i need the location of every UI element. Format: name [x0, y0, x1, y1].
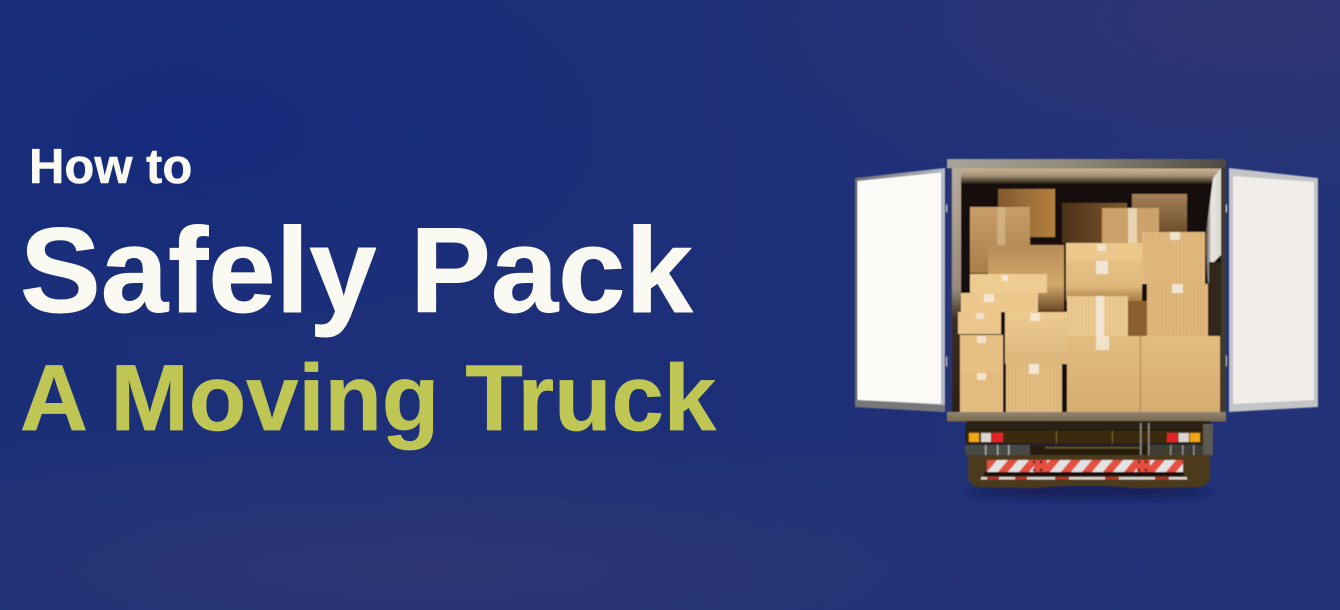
number plate brackets	[1033, 460, 1150, 472]
stacked cardboard boxes	[958, 189, 1220, 412]
ground shadow	[968, 485, 1212, 497]
rear lights right	[1167, 433, 1200, 442]
back row boxes	[970, 189, 1187, 273]
door hinges	[946, 204, 1227, 367]
left door	[855, 168, 945, 412]
front row boxes	[1005, 296, 1220, 412]
lights band	[966, 430, 1203, 444]
rear lights left	[969, 433, 1003, 442]
lower reflector strip	[981, 472, 1187, 480]
title	[20, 140, 717, 450]
middle row boxes	[988, 232, 1208, 336]
chassis and rear bumper	[965, 421, 1213, 488]
hazard stripe panel	[987, 460, 1183, 472]
right door	[1229, 168, 1318, 412]
cargo box body	[947, 159, 1226, 422]
left stack boxes	[958, 274, 1047, 412]
lower cross bar	[965, 423, 1213, 455]
heading: A Moving Truck: A Moving Truck	[20, 345, 717, 450]
heading: How to: How to	[29, 140, 192, 194]
heading: Safely Pack: Safely Pack	[20, 202, 693, 338]
moving truck illustration	[855, 159, 1318, 497]
